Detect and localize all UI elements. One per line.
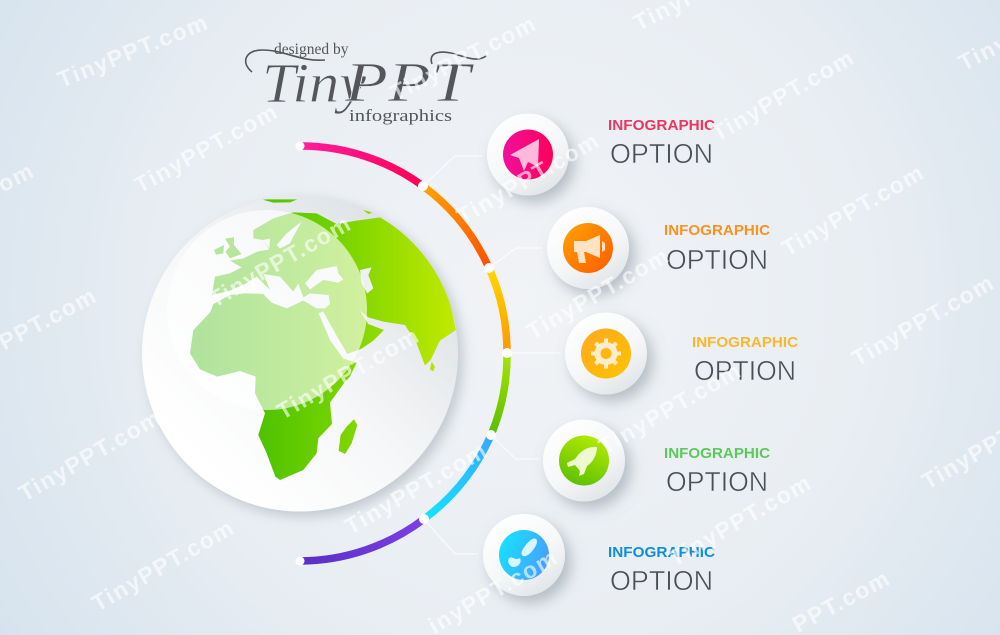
watermarks: TinyPPT.com bbox=[130, 98, 283, 198]
option 2: megaphone button bbox=[547, 207, 629, 289]
logo: TinyPPT designed by infographics bbox=[246, 41, 486, 125]
logo: TinyPPT designed by infographics: infographics bbox=[349, 106, 452, 125]
watermarks: TinyPPT.com bbox=[594, 357, 746, 459]
watermarks: TinyPPT.com bbox=[452, 127, 604, 229]
label 5: INFOGRAPHIC bbox=[608, 544, 715, 561]
watermarks: TinyPPT.com bbox=[204, 210, 356, 312]
logo: TinyPPT designed by infographics: Tiny bbox=[262, 53, 366, 115]
connector lines bbox=[423, 156, 560, 554]
watermarks: TinyPPT.com bbox=[707, 44, 859, 146]
continents bbox=[190, 199, 456, 480]
icon: megaphone bbox=[574, 235, 605, 263]
label 3 bbox=[692, 334, 798, 386]
label 5: OPTION bbox=[610, 565, 713, 596]
option 5: brush button bbox=[483, 514, 565, 596]
label 1 bbox=[608, 117, 715, 169]
watermarks: TinyPPT.com bbox=[386, 10, 541, 106]
watermarks: TinyPPT.com bbox=[87, 514, 239, 616]
label 3: INFOGRAPHIC bbox=[692, 334, 798, 351]
watermarks: TinyPPT.com bbox=[54, 8, 212, 93]
label 4 bbox=[664, 445, 770, 497]
option 4: rocket button bbox=[543, 420, 625, 502]
watermarks: TinyPPT.com bbox=[14, 404, 166, 506]
label 4: INFOGRAPHIC bbox=[664, 445, 770, 462]
Eurasia bbox=[212, 212, 456, 365]
icon: rocket bbox=[567, 447, 597, 476]
watermarks: TinyPPT.com bbox=[847, 269, 999, 371]
seas bbox=[263, 222, 373, 293]
Madagascar bbox=[339, 419, 357, 454]
label 2 bbox=[664, 222, 770, 275]
label 2: OPTION bbox=[666, 244, 768, 275]
label 4: OPTION bbox=[666, 466, 768, 497]
timeline arc bbox=[296, 142, 512, 566]
label 1: OPTION bbox=[610, 138, 713, 169]
logo: TinyPPT designed by infographics: designed by bbox=[274, 41, 349, 58]
watermarks: TinyPPT.com bbox=[272, 322, 424, 424]
Africa bbox=[190, 293, 357, 480]
option 1: paper plane button bbox=[487, 114, 569, 196]
label 1: INFOGRAPHIC bbox=[608, 117, 715, 134]
icon: gear bbox=[591, 338, 621, 368]
label 5 bbox=[608, 544, 715, 596]
globe sphere bbox=[142, 196, 458, 512]
watermarks: TinyPPT.com bbox=[777, 159, 929, 261]
highlight circle bbox=[167, 210, 367, 410]
option 3: gear button bbox=[565, 312, 647, 394]
northern islands bbox=[262, 199, 373, 214]
Sri Lanka bbox=[430, 362, 435, 371]
icon: paint brush bbox=[508, 538, 537, 567]
watermarks: TinyPPT.com bbox=[522, 242, 674, 344]
globe bbox=[142, 196, 458, 512]
label 2: INFOGRAPHIC bbox=[664, 222, 770, 239]
icon: paper plane bbox=[510, 139, 539, 171]
watermarks: TinyPPT.com bbox=[340, 437, 492, 539]
label 3: OPTION bbox=[694, 355, 796, 386]
United Kingdom and Ireland bbox=[214, 237, 242, 258]
watermarks: TinyPPT.com bbox=[664, 469, 816, 571]
logo: TinyPPT designed by infographics: PPT bbox=[344, 52, 475, 114]
